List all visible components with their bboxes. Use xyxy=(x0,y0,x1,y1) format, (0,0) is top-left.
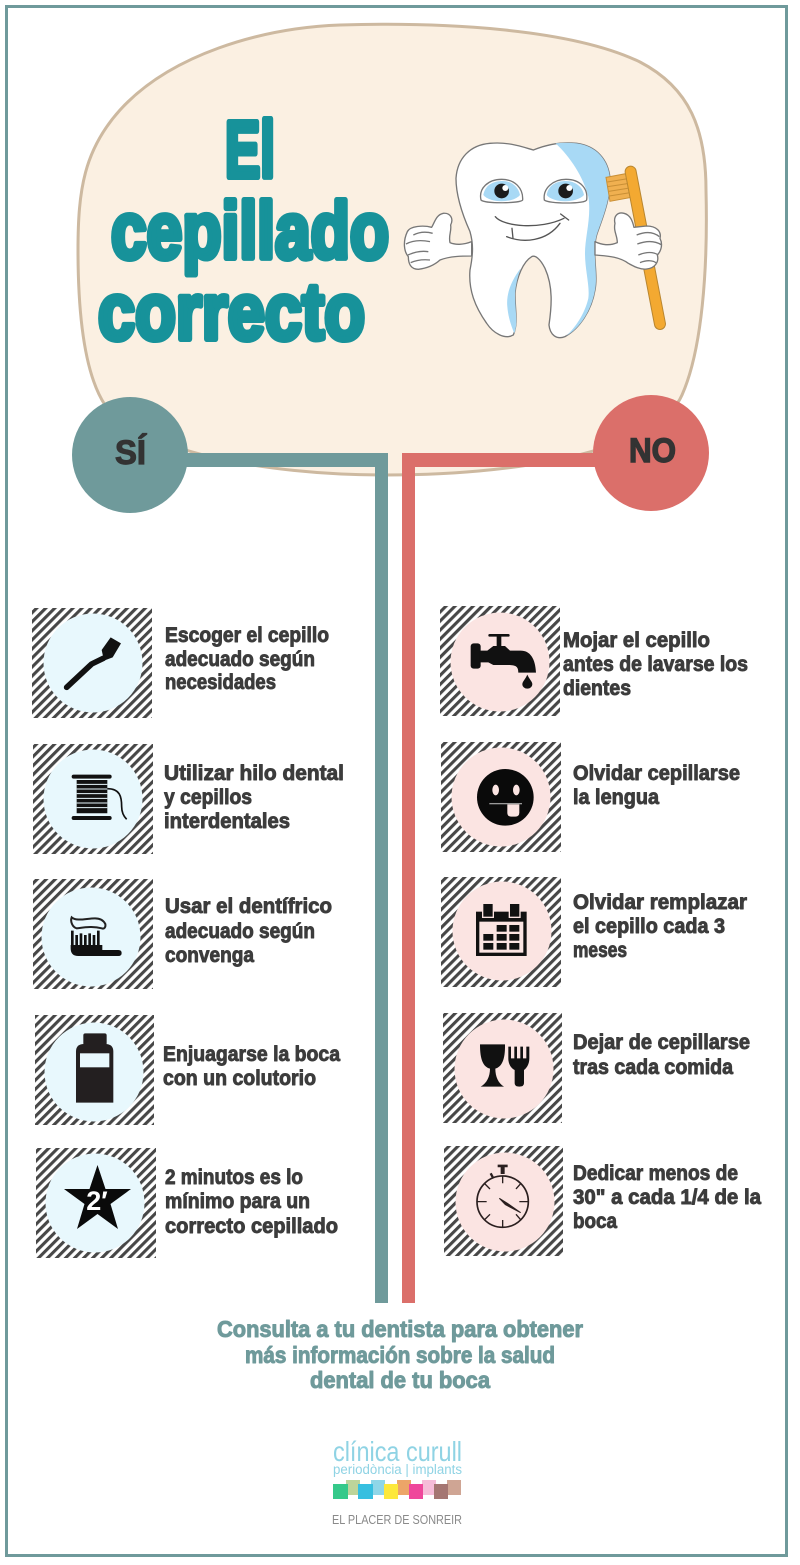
text: necesidades xyxy=(165,671,276,694)
panel: no item 2 tongue xyxy=(441,742,740,852)
connector: si line xyxy=(185,453,388,1303)
badge: si: SÍ xyxy=(115,434,147,472)
arms and hands xyxy=(404,213,662,269)
text xyxy=(163,1043,340,1090)
text: Usar el dentífrico xyxy=(165,895,332,918)
panel: si item 1 choose brush xyxy=(32,608,329,718)
logo colour squares xyxy=(333,1480,461,1499)
smile xyxy=(495,214,569,240)
text xyxy=(573,1031,750,1079)
toothbrush xyxy=(606,172,660,324)
tooth shading xyxy=(507,143,610,336)
logo: clinica curull: EL PLACER DE SONREIR xyxy=(332,1513,462,1527)
logo: clinica curull: clínica curull xyxy=(333,1436,462,1467)
text: y cepillos xyxy=(164,786,252,809)
panel: si item 2 floss xyxy=(33,744,344,854)
badge: no: NO xyxy=(629,432,676,470)
text: el cepillo cada 3 xyxy=(573,915,725,938)
text: Utilizar hilo dental xyxy=(164,762,344,785)
text: boca xyxy=(573,1210,617,1233)
header blob xyxy=(78,24,706,475)
icon: stopwatch xyxy=(477,1165,528,1227)
text xyxy=(165,1166,338,1238)
text xyxy=(563,629,748,700)
icon: calendar xyxy=(476,903,527,956)
text: antes de lavarse los xyxy=(563,653,748,676)
text: adecuado según xyxy=(165,920,315,943)
icon: star with two minutes xyxy=(64,1165,131,1229)
text xyxy=(573,762,740,809)
icon: star with two minutes: 2′ xyxy=(86,1186,108,1216)
panel: no item 1 wet brush xyxy=(440,606,748,716)
panel: no item 4 meal xyxy=(443,1013,750,1123)
text: con un colutorio xyxy=(163,1067,316,1090)
text: dientes xyxy=(563,677,631,700)
text xyxy=(573,1162,761,1233)
text: Mojar el cepillo xyxy=(563,629,710,652)
text: Olvidar cepillarse xyxy=(573,762,740,785)
text: convenga xyxy=(165,944,254,967)
text: Dedicar menos de xyxy=(573,1162,738,1185)
footer call to action xyxy=(217,1316,583,1393)
text: mínimo para un xyxy=(165,1190,310,1213)
panel: si item 5 two minutes xyxy=(36,1148,338,1258)
text xyxy=(573,891,747,962)
title: El xyxy=(225,105,275,194)
icon: face with tongue xyxy=(477,769,534,826)
text: interdentales xyxy=(164,810,290,833)
text: correcto cepillado xyxy=(165,1215,338,1238)
badge: si xyxy=(72,397,188,513)
title xyxy=(98,105,389,356)
icon: toothbrush with paste xyxy=(71,917,122,956)
title: correcto xyxy=(98,267,365,356)
text xyxy=(165,624,329,694)
badge: no xyxy=(593,395,709,511)
panel: si item 3 toothpaste xyxy=(33,879,332,989)
icon: dripping faucet xyxy=(471,634,536,689)
icon: floss spool xyxy=(72,775,127,820)
text: la lengua xyxy=(573,786,659,809)
footer call to action: más información sobre la salud xyxy=(245,1342,555,1368)
text xyxy=(165,895,332,967)
footer call to action: dental de tu boca xyxy=(310,1367,490,1393)
connector: no line xyxy=(402,453,602,1303)
logo: clinica curull: periodòncia | implants xyxy=(333,1462,462,1477)
text: tras cada comida xyxy=(573,1056,733,1079)
text xyxy=(164,762,344,833)
text: Enjuagarse la boca xyxy=(163,1043,340,1066)
icon: mouthwash bottle xyxy=(76,1033,113,1103)
footer call to action: Consulta a tu dentista para obtener xyxy=(217,1316,583,1342)
tooth body xyxy=(456,143,610,338)
eyes xyxy=(481,179,587,203)
title: cepillado xyxy=(111,186,389,275)
text: Escoger el cepillo xyxy=(165,624,329,647)
panel: no item 5 stopwatch xyxy=(444,1146,761,1256)
text: Olvidar remplazar xyxy=(573,891,747,914)
panel: no item 3 calendar xyxy=(441,877,747,987)
icon: glass and fork xyxy=(480,1044,529,1087)
icon: tooth mascot with toothbrush xyxy=(404,143,662,338)
icon: toothbrush xyxy=(67,637,121,687)
logo: clinica curull xyxy=(332,1436,462,1527)
text: meses xyxy=(573,939,627,962)
panel: si item 4 mouthwash xyxy=(35,1015,340,1125)
text: adecuado según xyxy=(165,648,315,671)
text: 30" a cada 1/4 de la xyxy=(573,1186,761,1209)
text: 2 minutos es lo xyxy=(165,1166,303,1189)
text: Dejar de cepillarse xyxy=(573,1031,750,1054)
